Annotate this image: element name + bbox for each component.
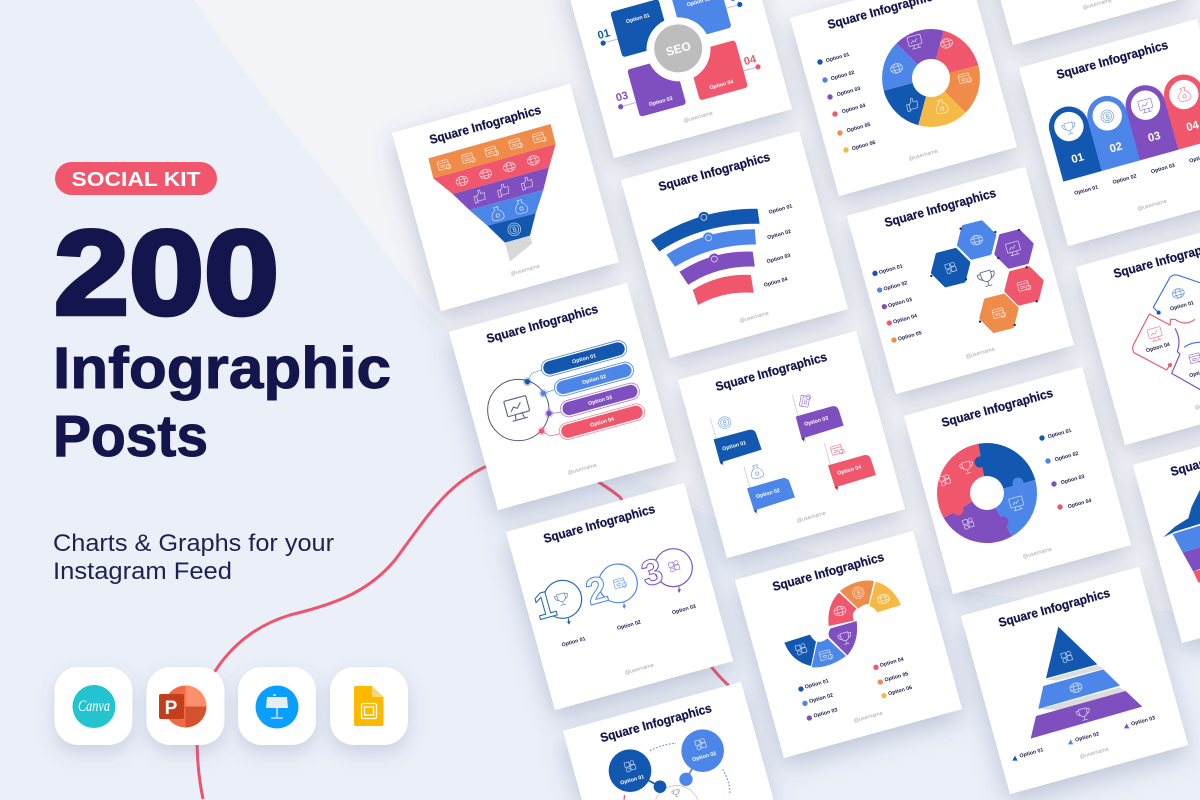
chart: arches: Option 01 (1074, 185, 1099, 197)
legend (872, 264, 923, 343)
pill: option 04: Option 04 (590, 416, 615, 429)
diagram: SEO blocks: SEO (664, 39, 692, 59)
pill: option 04 (557, 402, 647, 441)
card: monitor (449, 283, 676, 510)
legend: Option 06 (851, 140, 876, 152)
card: circles flow (563, 682, 774, 800)
card: hexagon (847, 167, 1074, 394)
chart: arches: 03 (1147, 130, 1162, 145)
subtitle: Charts & Graphs for your (53, 530, 334, 557)
pill: option 03: Option 03 (588, 395, 613, 407)
diagram: ribbons: Option 03 (804, 416, 829, 428)
headline: infographic: Infographic (53, 336, 391, 401)
legend: Option 03 (1060, 474, 1085, 486)
icon: keynote (238, 667, 316, 745)
card: mountain (1133, 416, 1200, 643)
card: ribbons (678, 331, 905, 558)
panel: s-curve post (735, 531, 962, 758)
legend: Option 03 (888, 297, 913, 309)
chart: stacked arcs: Option 03 (766, 253, 791, 265)
diagram: monitor hub and pills (488, 339, 647, 441)
option labels: Option 01 (561, 636, 586, 649)
diagram: circles flow: Option 02 (692, 751, 717, 763)
icon: powerpoint (146, 667, 224, 745)
diagram: 1 2 3 outlines: 1 (529, 582, 560, 628)
option labels (561, 604, 697, 649)
legend: Option 02 (830, 70, 855, 82)
panel: SEO post (565, 0, 792, 158)
legend: Option 03 (813, 707, 838, 720)
icon: google slides (330, 667, 408, 745)
card: s-curve (735, 531, 962, 758)
pill: option 02 (553, 360, 635, 398)
panel: puzzle post (904, 367, 1131, 594)
red swoosh line (197, 459, 735, 799)
legend: Option 01 (804, 678, 830, 691)
chart: arches: 01 (1070, 151, 1085, 166)
legend: Option 03 (1131, 715, 1156, 728)
background: light curved sweep (195, 0, 1200, 612)
panel: pyramid post (961, 567, 1188, 794)
legend: Option 04 (1067, 498, 1092, 510)
chart: s-curve segments (784, 581, 913, 721)
card: arcs (621, 131, 848, 358)
card: numbered steps: @username (624, 663, 655, 676)
legend: Option 03 (836, 86, 861, 98)
legend: Option 01 (825, 52, 850, 64)
pill: option 03 (559, 381, 641, 419)
headline: posts: Posts (53, 404, 208, 469)
option labels: Option 03 (671, 604, 697, 616)
card: arches: @username (1137, 199, 1168, 212)
panel: top right partial post (964, 0, 1191, 45)
diagram: circles flow: Option 01 (620, 774, 645, 787)
funnel icons (437, 131, 547, 237)
card: arcs: Square Infographics (657, 150, 772, 194)
card: funnel (392, 84, 619, 311)
heading: circles flow: Square Infographics (599, 701, 713, 745)
legend: Option 01 (878, 264, 904, 276)
option labels: Option 02 (616, 620, 642, 632)
diagram: SEO blocks: Option 04 (709, 79, 734, 91)
card: ribbons: Square Infographics (714, 350, 829, 394)
legend: Option 05 (897, 330, 923, 343)
pill: option 01: Option 01 (572, 353, 597, 365)
legend: Option 02 (809, 693, 834, 705)
chart: stacked arcs (647, 189, 812, 315)
card: SEO (565, 0, 792, 158)
subtitle: Instagram Feed (53, 558, 232, 585)
legend: Option 02 (883, 280, 908, 293)
card: pyramid: @username (1079, 747, 1110, 760)
card: puzzle: @username (1022, 547, 1053, 560)
diagram: SEO blocks: 04 (743, 53, 758, 68)
chart: stacked arcs: Option 02 (767, 229, 792, 241)
card: monitor: Square Infographics (485, 302, 600, 346)
card: ribbons: @username (796, 511, 827, 524)
card: donut (790, 0, 1017, 196)
segment icons (795, 586, 890, 662)
legend: Option 01 (1019, 747, 1044, 760)
panel: funnel post (392, 84, 619, 311)
diagram: SEO blocks: Option 01 (625, 13, 651, 25)
chart: mountain (1163, 487, 1200, 583)
panel: ribbons post (678, 331, 905, 558)
diagram: outline cycle: Option 04 (1145, 342, 1171, 354)
pill: option 01 (539, 339, 629, 378)
chart: arches: Option 02 (1112, 174, 1137, 186)
chart: hexagons (930, 222, 1042, 331)
card: arcs: @username (739, 311, 770, 324)
legend (1012, 715, 1156, 761)
card: pyramid (961, 567, 1188, 794)
legend: Option 04 (841, 103, 866, 115)
card: pyramid: Square Infographics (997, 586, 1112, 630)
card: partial (964, 0, 1191, 45)
legend: Option 02 (1075, 731, 1100, 744)
card: monitor: @username (567, 463, 598, 476)
legend: Option 02 (1054, 451, 1079, 463)
chart: stacked arcs: Option 01 (768, 204, 793, 216)
icon: canva: Canva (78, 698, 110, 715)
panel: numbered steps post (506, 483, 733, 710)
panel: hexagon post (847, 167, 1074, 394)
diagram: SEO blocks: 01 (596, 27, 611, 42)
chart: arches (1044, 70, 1200, 197)
card: SEO: @username (683, 111, 714, 124)
legend (1039, 428, 1092, 510)
diagram: 1 2 3 outlines: 2 (581, 567, 612, 613)
card: puzzle: Square Infographics (940, 386, 1055, 430)
diagram: ribbons: Option 04 (837, 465, 862, 477)
badge: social kit: SOCIAL KIT (72, 168, 201, 191)
diagram: circles flow (609, 729, 730, 800)
diagram: outline cycle (1133, 275, 1200, 393)
pill: option 02: Option 02 (582, 374, 607, 386)
card: puzzle (904, 367, 1131, 594)
chart: puzzle ring (937, 443, 1037, 543)
panel: arches post (1019, 19, 1200, 246)
chart: arches: Option 03 (1150, 163, 1176, 175)
diagram: outline cycle: Option 01 (1169, 300, 1195, 313)
chart: arches: 02 (1108, 141, 1124, 155)
icon: canva (54, 667, 132, 745)
badge: social kit (55, 162, 217, 195)
legend (798, 657, 913, 721)
chart: arches: 04 (1185, 119, 1200, 134)
panel: monitor post (449, 283, 676, 510)
chart: donut (882, 29, 980, 127)
card: s-curve: @username (853, 711, 884, 724)
diagram: SEO blocks (593, 0, 766, 122)
card: numbered steps (506, 483, 733, 710)
legend: Option 05 (846, 122, 871, 134)
card: funnel: Square Infographics (428, 103, 543, 147)
card: hexagon: @username (965, 347, 996, 360)
panel: donut post (790, 0, 1017, 196)
legend: Option 06 (888, 685, 913, 697)
diagram: 1 2 3 outlines: 3 (637, 550, 667, 594)
card: outline cycle (1076, 218, 1200, 445)
chart: pyramid (1012, 627, 1156, 761)
card: numbered steps: Square Infographics (542, 502, 657, 546)
legend: Option 04 (879, 657, 905, 669)
card: arches: Square Infographics (1055, 38, 1170, 82)
panel: arcs post (621, 131, 848, 358)
subtitle (53, 530, 334, 585)
card: s-curve: Square Infographics (771, 550, 886, 594)
legend: Option 04 (893, 313, 918, 326)
card: donut: @username (908, 149, 939, 162)
chart: funnel (428, 124, 556, 262)
icon: powerpoint: P (165, 698, 178, 719)
diagram: SEO blocks: Option 03 (648, 96, 673, 108)
diagram: ribbons: Option 02 (755, 488, 781, 500)
panel: circles flow post (563, 682, 774, 800)
diagram: ribbons: Option 01 (722, 440, 747, 453)
legend (817, 52, 876, 153)
chart: stacked arcs: Option 04 (763, 276, 788, 289)
card: hexagon: Square Infographics (883, 186, 998, 230)
panel: outline cycle post (1076, 218, 1200, 445)
legend: Option 01 (1047, 428, 1072, 440)
card: arches (1019, 19, 1200, 246)
panel: mountain post (1133, 416, 1200, 643)
diagram: SEO blocks: 03 (615, 90, 630, 104)
card: funnel: @username (510, 264, 541, 277)
diagram: ribbons (710, 394, 876, 515)
legend: Option 05 (884, 671, 909, 684)
headline number: 200 (54, 206, 279, 340)
diagram: 1 2 3 outlines (529, 549, 697, 649)
